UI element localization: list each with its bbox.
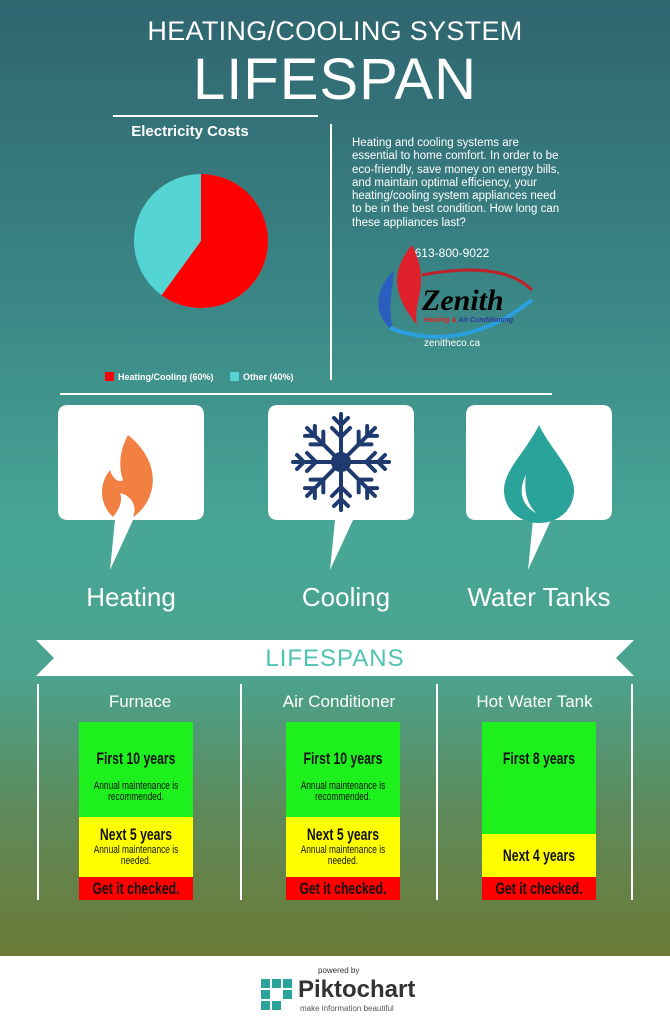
banner: lifespans: [36, 640, 634, 676]
column: furnace: First 10 years: [97, 749, 175, 768]
column: hot water tank: Get it checked.: [495, 879, 583, 898]
title: HEATING/COOLING SYSTEM: [147, 16, 523, 46]
footer: piktochart: Piktochart: [298, 976, 415, 1003]
column: air conditioner: [282, 692, 400, 900]
logo: Zenith: zenitheco.ca: [424, 338, 480, 349]
logo: Zenith: [378, 245, 534, 349]
chart: electricity costs pie: Heating/Cooling (60%): [118, 372, 214, 382]
footer: piktochart: make information beautiful: [300, 1004, 394, 1013]
column: air conditioner: Annual maintenance is needed.: [301, 844, 385, 867]
title: [147, 16, 523, 112]
logo: Zenith: Zenith: [421, 284, 504, 317]
icon card: cooling: [268, 405, 414, 570]
column: hot water tank: Next 4 years: [503, 846, 575, 865]
chart: electricity costs pie: Other (40%): [243, 372, 294, 382]
chart: electricity costs pie: [105, 123, 294, 382]
title: LIFESPAN: [193, 47, 477, 112]
column: hot water tank: First 8 years: [503, 749, 575, 768]
icon card: heating: [58, 405, 204, 570]
footer: piktochart: powered by: [318, 966, 359, 975]
intro text: Heating and cooling systems are essential to home comfort. In order to be eco-friendly, save money on energy bills, and maintain optimal efficiency, your heating/cooling system appliances need to be in the best condition. How long can these appliances last?: [352, 137, 560, 229]
column: hot water tank: Hot Water Tank: [476, 692, 593, 711]
column: hot water tank: [476, 692, 596, 900]
logo: Zenith: Heating & Air Conditioning: [424, 317, 514, 324]
column: air conditioner: Annual maintenance is recommended.: [301, 780, 385, 803]
column: air conditioner: Air Conditioner: [283, 692, 395, 711]
labels: Heating: [86, 582, 176, 612]
column: air conditioner: Next 5 years: [307, 825, 379, 844]
logo: Zenith: 613-800-9022: [415, 246, 489, 260]
column: furnace: Furnace: [109, 692, 171, 711]
column: furnace: Annual maintenance is recommended.: [94, 780, 178, 803]
column: furnace: Get it checked.: [92, 879, 180, 898]
column: air conditioner: First 10 years: [304, 749, 382, 768]
column: furnace: Next 5 years: [100, 825, 172, 844]
chart: electricity costs pie: Electricity Costs: [131, 123, 249, 140]
column: furnace: Annual maintenance is needed.: [94, 844, 178, 867]
footer: piktochart: [261, 966, 416, 1013]
column: furnace: [79, 692, 193, 900]
text: Cooling: [302, 582, 390, 612]
column: air conditioner: Get it checked.: [299, 879, 387, 898]
text: Water Tanks: [467, 582, 611, 612]
banner: lifespans: LIFESPANS: [265, 645, 405, 672]
icon card: water tank: [466, 405, 612, 570]
